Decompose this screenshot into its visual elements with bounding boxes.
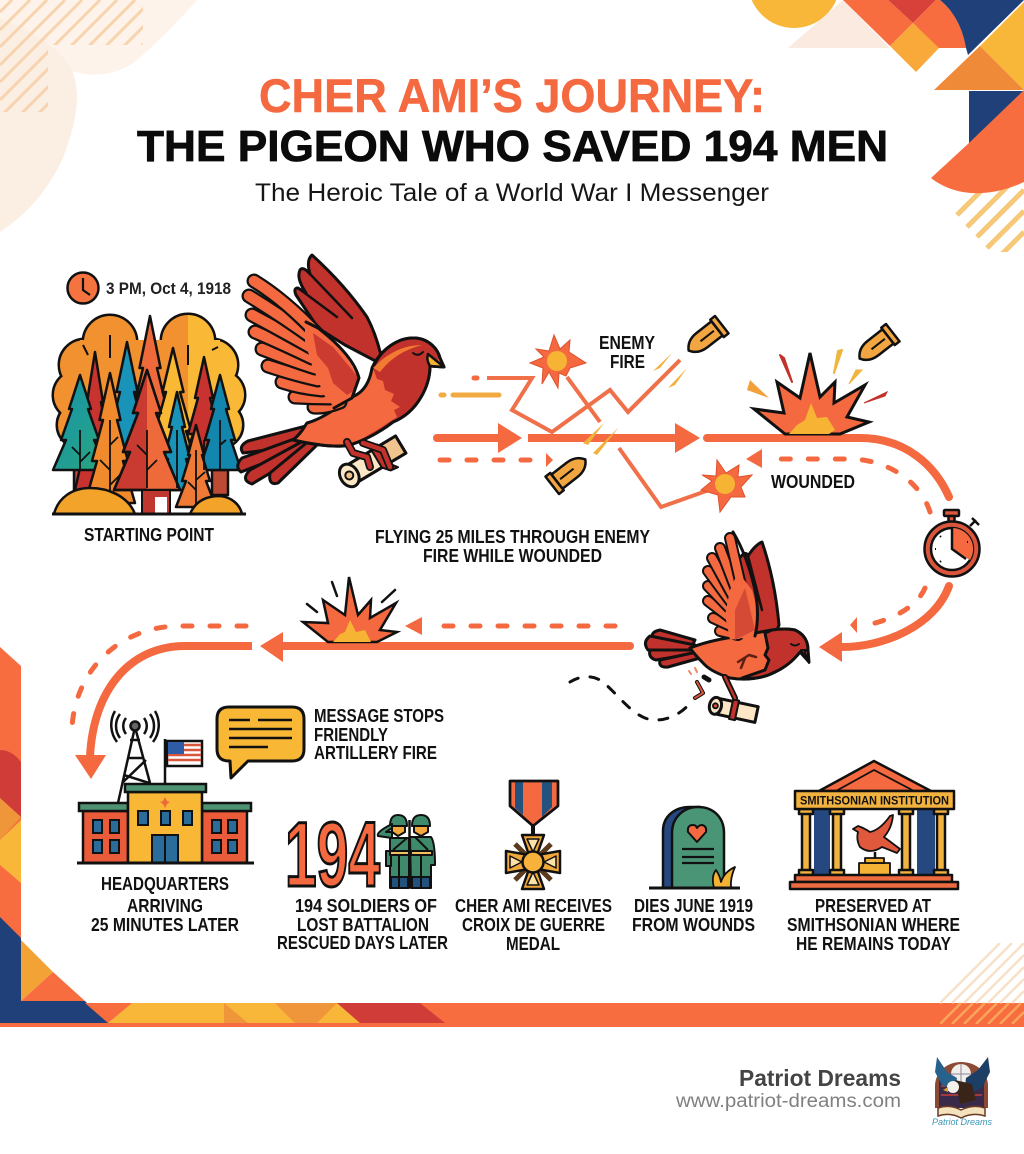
- label: headquarters: 25 MINUTES LATER: [91, 915, 239, 935]
- label: headquarters: [91, 874, 239, 935]
- arrow: return line to burst: [260, 632, 630, 662]
- yellow tracer streaks: [583, 353, 687, 455]
- left soldier: [390, 838, 409, 888]
- centre block: [128, 792, 202, 863]
- decoration: top-left blobs: [0, 0, 197, 232]
- logo: patriot dreams eagle: Patriot Dreams: [932, 1117, 992, 1128]
- label: enemy fire: [599, 333, 655, 372]
- arrow: first flight segment: [437, 423, 700, 453]
- label: dies june 1919: DIES JUNE 1919: [634, 896, 753, 916]
- decoration: top-right geometric shapes: [748, 0, 1024, 258]
- label: preserved at smithsonian: [787, 896, 960, 954]
- label: croix de guerre: [455, 896, 612, 954]
- zigzag flight path: [487, 360, 709, 507]
- decoration: bottom band: [0, 943, 1024, 1027]
- icon: wounded pigeon: [645, 532, 809, 724]
- scroll: [707, 695, 759, 724]
- label: 194 soldiers: 194 SOLDIERS OF: [295, 896, 437, 916]
- label: 194 soldiers: LOST BATTALION: [297, 915, 429, 935]
- scroll: [335, 434, 411, 496]
- decoration: left column: [0, 647, 108, 1024]
- radio tower: [111, 711, 159, 803]
- tail: [645, 630, 700, 667]
- icon: croix de guerre medal: [506, 781, 560, 889]
- icon: flying pigeon with scroll: [238, 255, 444, 496]
- right soldier: [410, 837, 435, 888]
- tail feathers: [238, 425, 320, 484]
- icon: headquarters building: [77, 711, 254, 863]
- large burst: wounded moment: [747, 350, 887, 434]
- label: preserved at smithsonian: HE REMAINS TODAY: [796, 934, 951, 954]
- broken leg: [704, 677, 709, 680]
- subtitle: The Heroic Tale of a World War I Messenger: [255, 179, 769, 207]
- breast and head: [350, 338, 440, 445]
- label: flying through enemy fire: [375, 527, 650, 566]
- legs: [347, 442, 370, 467]
- label: message stops artillery: MESSAGE STOPS: [314, 706, 444, 726]
- icon: saluting soldiers: [378, 815, 435, 888]
- label: dies june 1919: FROM WOUNDS: [632, 915, 755, 935]
- icon: bullets: [545, 316, 900, 494]
- label: wounded: WOUNDED: [771, 472, 855, 492]
- label: message stops artillery: [314, 706, 444, 763]
- label: preserved at smithsonian: SMITHSONIAN WHERE: [787, 915, 960, 935]
- icon: autumn forest starting point: [52, 315, 246, 514]
- dashed arrow: return to wounded: [746, 449, 930, 512]
- icon: clock with start time: [68, 272, 231, 304]
- title line 1: CHER AMI’S JOURNEY:: [259, 69, 765, 122]
- icon: gravestone: [649, 807, 740, 888]
- label: starting point: STARTING POINT: [84, 525, 214, 545]
- front wing coverts: [305, 325, 359, 407]
- burst: lower track explosion: [303, 577, 397, 642]
- front wing feathers: [708, 538, 742, 635]
- label: croix de guerre: CHER AMI RECEIVES: [455, 896, 612, 916]
- dashed arrow: to wounded pigeon: [850, 588, 925, 633]
- icon: stopwatch: [924, 510, 980, 576]
- footer brand text: www.patriot-dreams.com: [675, 1091, 901, 1112]
- icon: smithsonian building: [790, 761, 958, 889]
- label: enemy fire: ENEMY: [599, 333, 655, 353]
- big number 194: 194: [285, 804, 380, 906]
- arrow: curved path to headquarters: [75, 646, 252, 779]
- arrow: curved path to wounded pigeon: [819, 586, 949, 662]
- arrow: curved path to stopwatch: [707, 438, 949, 497]
- flag: [165, 739, 202, 784]
- label: croix de guerre: CROIX DE GUERRE: [462, 915, 605, 935]
- label: headquarters: ARRIVING: [127, 896, 203, 916]
- body: [690, 629, 809, 679]
- back wing: [295, 255, 383, 365]
- label: croix de guerre: MEDAL: [506, 934, 560, 954]
- front wing feathers: [249, 281, 340, 407]
- back wing: [735, 542, 779, 640]
- label: enemy fire: FIRE: [610, 352, 645, 372]
- dashed black flight trail: [570, 677, 690, 720]
- label: flying through enemy fire: FLYING 25 MILES THROUGH ENEMY: [375, 527, 650, 547]
- logo: patriot dreams eagle: [932, 1057, 992, 1128]
- label: headquarters: HEADQUARTERS: [101, 874, 229, 894]
- label: dies june 1919: [632, 896, 755, 935]
- windows: [93, 811, 237, 863]
- icon: speech bubble: [217, 707, 304, 778]
- motion lines: [441, 378, 499, 395]
- footer brand text: [675, 1065, 901, 1112]
- label: preserved at smithsonian: PRESERVED AT: [815, 896, 931, 916]
- label: 194 soldiers: [277, 896, 448, 953]
- dashed arrow: upper return: [405, 617, 615, 635]
- label: message stops artillery: ARTILLERY FIRE: [314, 743, 437, 763]
- label: flying through enemy fire: FIRE WHILE WOUNDED: [423, 546, 602, 566]
- wings: [83, 811, 128, 863]
- icon: clock with start time: 3 PM, Oct 4, 1918: [106, 280, 231, 298]
- title line 2: THE PIGEON WHO SAVED 194 MEN: [137, 122, 888, 171]
- dashed arrow: lower track: [440, 453, 553, 467]
- dashed arrow: to headquarters: [72, 626, 246, 728]
- small burst: wound: [701, 460, 752, 512]
- label: message stops artillery: FRIENDLY: [314, 725, 388, 745]
- small burst: enemy fire: [530, 335, 586, 388]
- label: 194 soldiers: RESCUED DAYS LATER: [277, 933, 448, 953]
- body: [293, 338, 444, 446]
- bird statue: [853, 815, 900, 853]
- front wing coverts: [725, 572, 758, 640]
- footer brand text: Patriot Dreams: [739, 1065, 901, 1091]
- icon: smithsonian building: SMITHSONIAN INSTITUTION: [800, 796, 949, 808]
